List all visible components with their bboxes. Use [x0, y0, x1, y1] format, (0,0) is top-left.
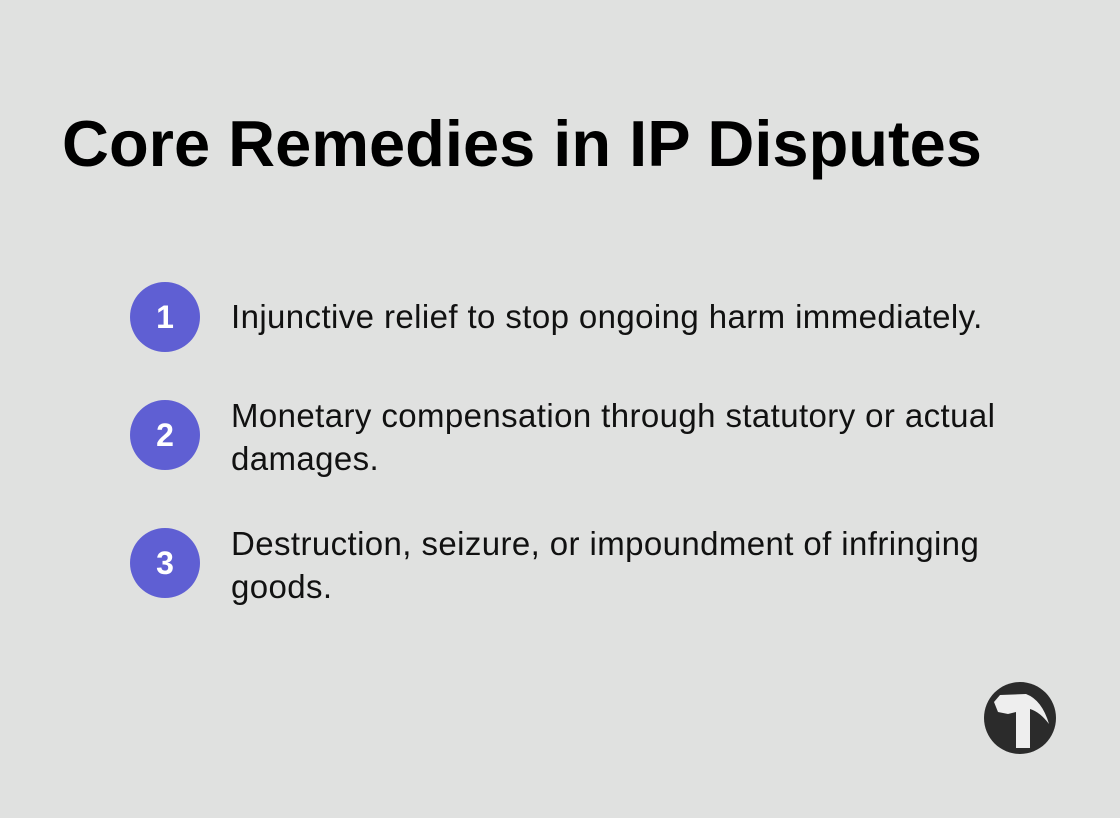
text 2: Monetary compensation through statutory or actual damages. — [231, 397, 995, 477]
text 3: Destruction, seizure, or impoundment of infringing goods. — [231, 525, 979, 605]
text 1: Injunctive relief to stop ongoing harm immediately. — [231, 298, 983, 335]
badge 1 — [130, 282, 200, 352]
title: Core Remedies in IP Disputes — [62, 107, 982, 180]
badge 2: 2 — [156, 417, 174, 453]
badge 3: 3 — [156, 545, 174, 581]
badge 2 — [130, 400, 200, 470]
badge 3 — [130, 528, 200, 598]
icon: hammer logo — [984, 682, 1056, 754]
item 1 — [130, 282, 983, 352]
badge 1: 1 — [156, 299, 174, 335]
item 2 — [130, 397, 995, 477]
item 3 — [130, 525, 979, 605]
